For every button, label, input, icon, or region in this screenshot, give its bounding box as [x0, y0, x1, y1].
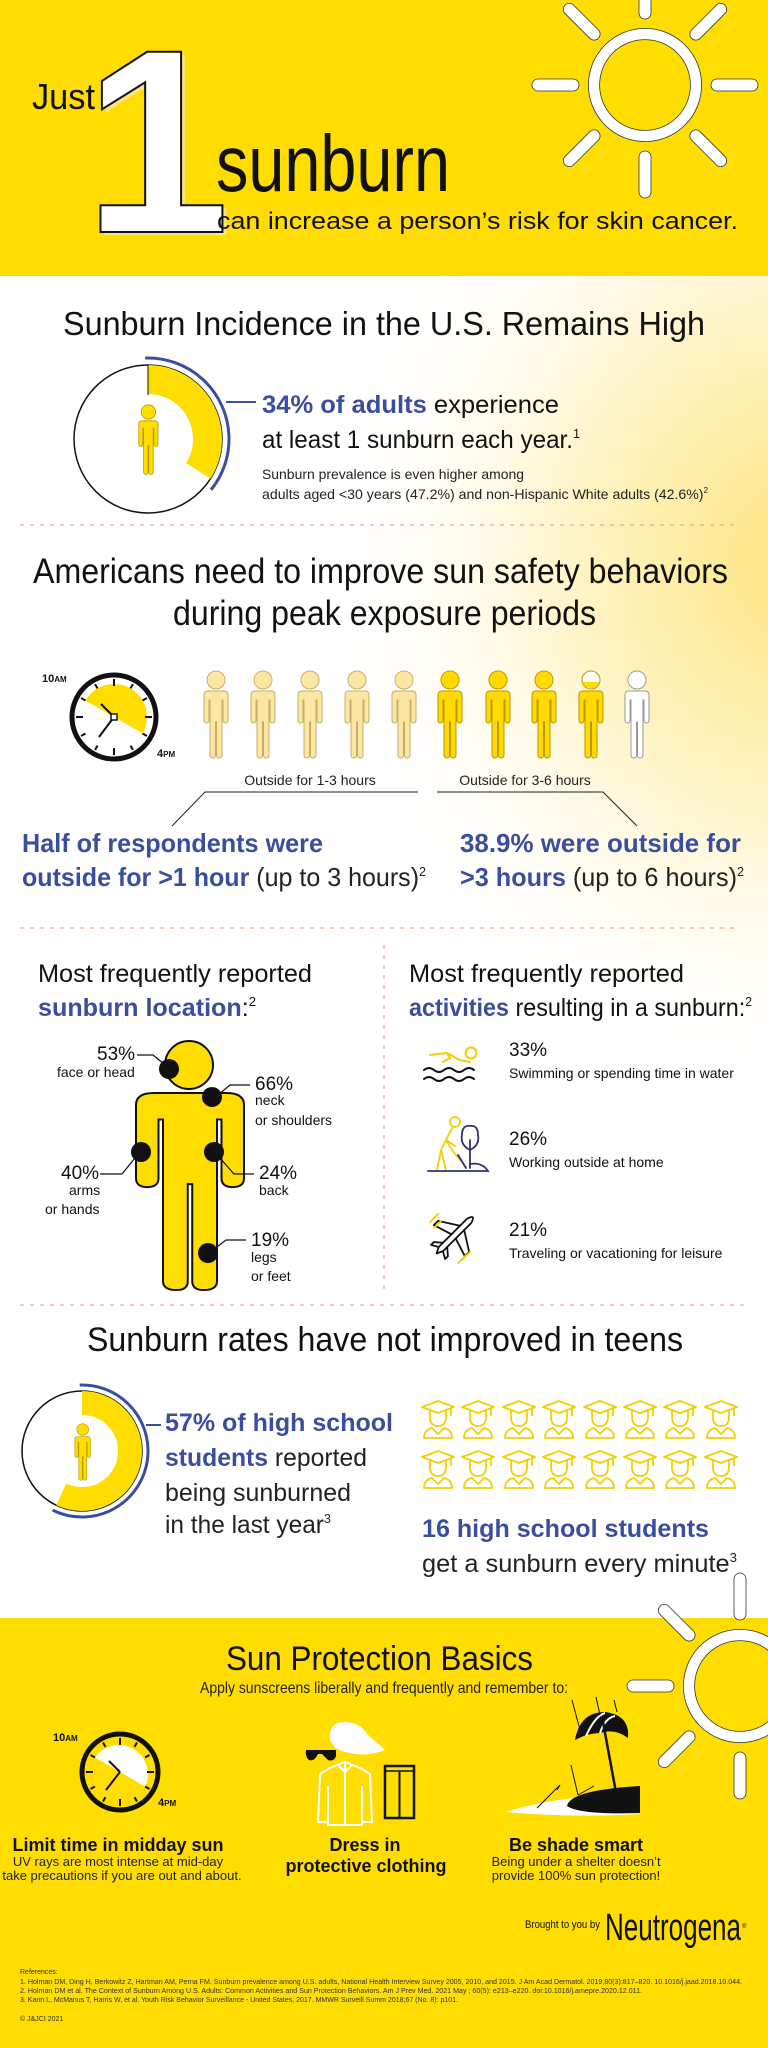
text: 57% of high school students: 3 [324, 1511, 331, 1526]
figure: body with burn locations: 53% [97, 1044, 135, 1065]
text: shade smart [491, 1835, 661, 1883]
heading: activities [409, 960, 752, 1022]
text: 34% of adults: 1 [573, 426, 580, 441]
text: 26% working [509, 1129, 664, 1170]
text: 21% traveling [509, 1220, 723, 1261]
figure: body with burn locations: 19% [251, 1230, 289, 1251]
stat: 38.9%: >3 hours (up to 6 hours) [460, 862, 742, 892]
figure: body with burn locations: legs [251, 1249, 277, 1265]
text: 16 students per minute: 16 high school students [422, 1515, 709, 1543]
labels: outside hours with brackets: Outside for 3-6 hours [459, 772, 591, 788]
icon: clock 10am-4pm: 10AM [42, 673, 67, 685]
icon: clothing [306, 1722, 414, 1825]
figure: body with burn locations: 66% [255, 1074, 293, 1095]
title: Just 1 sunburn: Just [32, 76, 95, 117]
icon: clock 10am-4pm [42, 673, 175, 760]
text: 16 students per minute [422, 1515, 737, 1578]
labels: outside hours with brackets [172, 772, 637, 826]
figure: body with burn locations: 24% [259, 1163, 297, 1184]
figure: body with burn locations: arms [69, 1182, 100, 1198]
stat: half of respondents: 2 [419, 864, 426, 879]
chart: 57% donut [14, 1383, 161, 1519]
text: 33% swimming [509, 1040, 734, 1081]
text: shade smart: Being under a shelter doesn’t [491, 1854, 661, 1869]
text: dress: protective clothing [285, 1856, 447, 1876]
text: 33% swimming: 33% [509, 1040, 547, 1061]
subtitle: can increase a person’s risk for skin cancer. [217, 208, 738, 235]
references: 1. Holman DM, Ding H, Berkowitz Z, Hartman AM, Perna FM. Sunburn prevalence among U.S. adults, National Health Interview Survey 2005, 2010, and 2015. J Am Acad Dermatol. 2019;80(3):817–820. 10.1016/j.jaad.2018.10.044. [20, 1979, 742, 1986]
stat: half of respondents [22, 828, 426, 892]
text: 33% swimming: Swimming or spending time in water [509, 1065, 734, 1081]
title: Just 1 sunburn [32, 0, 450, 291]
references [20, 1969, 742, 2023]
references: References: [20, 1969, 58, 1976]
text: limit time: UV rays are most intense at mid-day [13, 1854, 224, 1869]
text: 34% of adults: at least 1 sunburn each year. [262, 426, 583, 454]
references: 3. Kann L, McManus T, Harris W, et al. Youth Risk Behavior Surveillance - United States, 2017. MMWR Surveill Summ 2018;67 (No. 8): p101. [20, 1997, 458, 2004]
icon: umbrella shade [505, 1697, 640, 1816]
icon: swimmer [424, 1048, 476, 1081]
figure: body with burn locations: back [259, 1182, 290, 1198]
stat: 38.9%: 2 [737, 864, 744, 879]
text: limit time [0, 1835, 242, 1883]
icon: clock 10am-4pm: 4PM [157, 748, 175, 760]
text: 16 students per minute: get a sunburn every minute [422, 1550, 725, 1578]
footer panel: sun protection basics [0, 1573, 768, 2048]
figure: body with burn locations: neck [255, 1092, 286, 1108]
text: 21% traveling: Traveling or vacationing for leisure [509, 1245, 723, 1261]
heading: Sunburn Incidence: Sunburn Incidence in the U.S. Remains High [63, 305, 705, 342]
heading: activities: Most frequently reported [409, 960, 684, 988]
figure: body with burn locations: or shoulders [255, 1112, 332, 1128]
text: shade smart: provide 100% sun protection! [492, 1868, 660, 1883]
text: limit time: Limit time in midday sun [12, 1835, 224, 1855]
text: dress: Dress in [329, 1835, 401, 1855]
heading: Americans need to improve: during peak exposure periods [173, 594, 596, 633]
text: 57% of high school students: 57% of high school [165, 1409, 393, 1437]
text: 26% working: 26% [509, 1129, 547, 1150]
text: 16 students per minute: 3 [730, 1550, 737, 1565]
icon: footer sun [627, 1573, 768, 1799]
icon: gardener [428, 1117, 488, 1171]
text: 34% of adults: Sunburn prevalence is even higher among [262, 466, 524, 482]
figure: body with burn locations [45, 1041, 332, 1290]
references: © J&JCI 2021 [20, 2015, 63, 2023]
title: Just 1 sunburn: 1 [84, 0, 230, 288]
text: 57% of high school students: being sunburned [165, 1479, 351, 1507]
figure: body with burn locations: or hands [45, 1201, 99, 1217]
heading: activities: activities resulting in a sunburn: [409, 994, 762, 1022]
text: 34% of adults: 2 [704, 486, 709, 495]
labels: outside hours with brackets: Outside for 1-3 hours [244, 772, 376, 788]
icon: clock footer: 4PM [158, 1797, 176, 1809]
text: 21% traveling: 21% [509, 1220, 547, 1241]
references: 2. Holman DM et al. The Context of Sunburn Among U.S. Adults: Common Activities and Sun Protection Behaviors. Am J Prev Med. 2021 May ; 60(5): e213–e220. doi:10.1016/j.amepre.2020.12.011. [20, 1988, 642, 1995]
stat: half of respondents: Half of respondents were [22, 828, 323, 858]
stat: 38.9%: 38.9% were outside for [460, 828, 741, 858]
heading: sunburn location: Most frequently reported [38, 960, 312, 988]
background glow [0, 276, 768, 1618]
heading: sunburn location [38, 960, 312, 1022]
heading: Americans need to improve: Americans need to improve sun safety behaviors [33, 552, 728, 591]
figure: body with burn locations: or feet [251, 1268, 291, 1284]
title: Just 1 sunburn: 1 [88, 0, 234, 291]
text: limit time: - take precautions if you are out and about. [0, 1868, 242, 1883]
text: shade smart: Be shade smart [509, 1835, 643, 1855]
stat: 38.9% [460, 828, 744, 892]
icon: sun [532, 0, 758, 198]
heading: sunburn location: sunburn location: [38, 994, 249, 1022]
heading: sunburn location: 2 [249, 994, 256, 1009]
title: Just 1 sunburn: sunburn [216, 119, 450, 208]
text: 26% working: Working outside at home [509, 1154, 664, 1170]
icon: clock footer: 10AM [53, 1732, 78, 1744]
text: 57% of high school students [165, 1409, 393, 1539]
logo: Neutrogena [525, 1907, 747, 1949]
text: 57% of high school students: students reported [165, 1444, 367, 1472]
figure: body with burn locations: face or head [57, 1064, 135, 1080]
chart: 34% donut [64, 355, 256, 523]
text: 34% of adults: adults aged <30 years (47.2%) and non-Hispanic White adults (42.6%) [262, 486, 700, 502]
icon: clock footer [53, 1732, 176, 1810]
text: 57% of high school students: in the last year [165, 1511, 328, 1539]
heading: Sun Protection Basics [226, 1640, 533, 1678]
text: 34% of adults [262, 391, 709, 502]
heading: teens: Sunburn rates have not improved in teens [87, 1321, 683, 1359]
text: dress [285, 1835, 447, 1876]
logo: Neutrogena: ® [742, 1923, 747, 1930]
figure: body with burn locations: 40% [61, 1163, 99, 1184]
logo: Neutrogena: Brought to you by [525, 1919, 600, 1931]
text: 34% of adults: 34% of adults experience [262, 391, 559, 419]
chart: 10 people [204, 671, 649, 758]
heading: activities: 2 [745, 994, 752, 1009]
header band [0, 0, 768, 291]
icon: airplane [421, 1202, 488, 1269]
subheading: Apply sunscreens liberally and frequently and remember to: [200, 1680, 568, 1697]
stat: half of respondents: outside for >1 hour (up to 3 hours) [22, 862, 426, 892]
heading: Americans need to improve [33, 552, 728, 633]
chart: 16 graduation caps [422, 1401, 737, 1488]
